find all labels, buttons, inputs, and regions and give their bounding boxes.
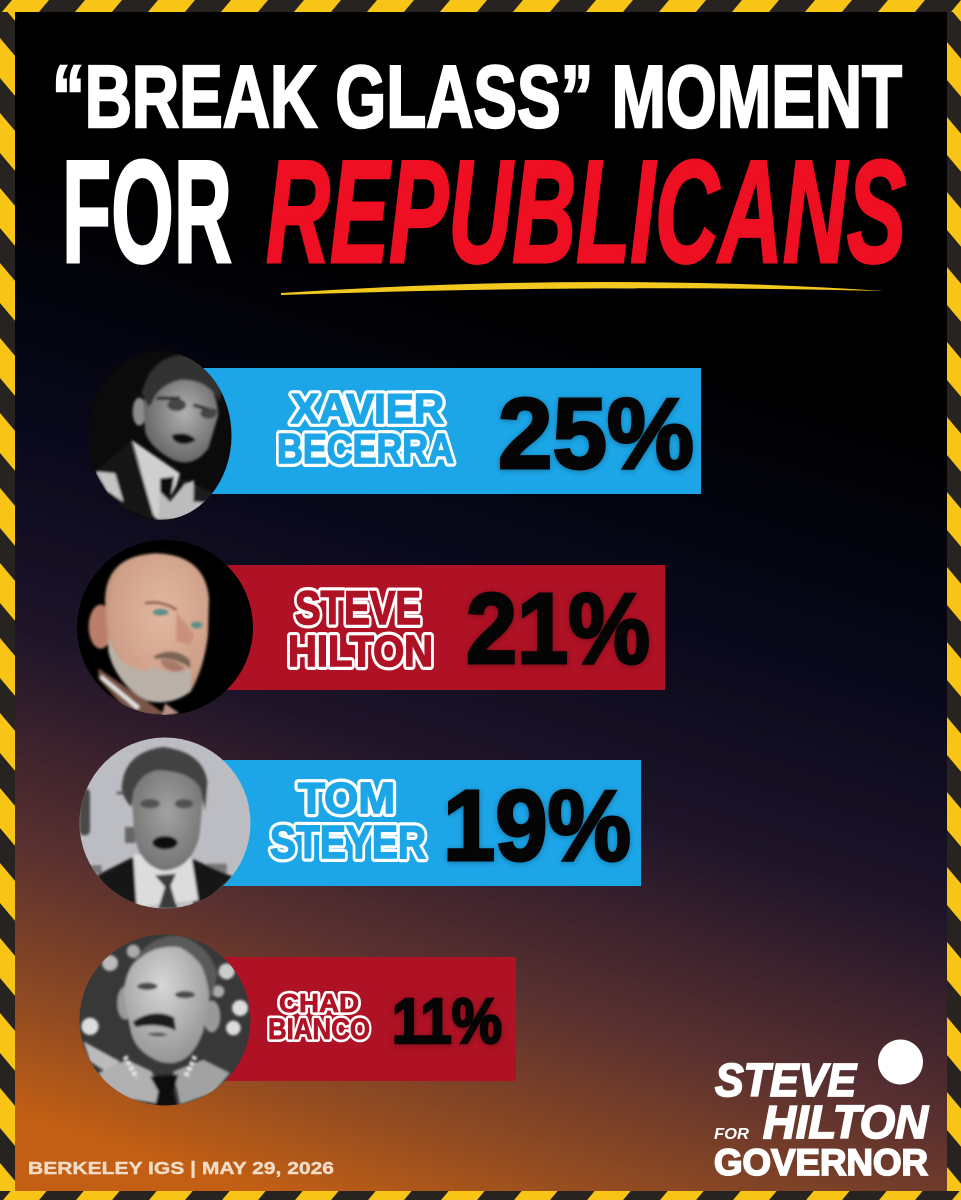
name: Xavier Becerra: XAVIER [291,385,444,432]
portrait: Becerra [85,348,235,523]
bar: Bianco [200,957,516,1081]
value: 19%: 19% [443,770,631,882]
name: Chad Bianco: CHAD [279,988,359,1018]
portrait: Bianco [78,933,253,1108]
value: 25%: 25% [498,378,694,490]
name: Steve Hilton: STEVE [295,581,421,634]
name: Xavier Becerra: BECERRA [277,425,454,472]
name: Tom Steyer: TOM [298,774,395,823]
row: Steve Hilton 21% [75,538,665,718]
name: Chad Bianco: BIANCO [268,1013,370,1046]
bar: Steyer [200,760,641,886]
portrait: Steyer [78,736,253,911]
name: Tom Steyer [270,774,426,868]
yellow underline [281,282,884,295]
campaign logo: HILTON [763,1096,929,1148]
name: Tom Steyer: STEYER [270,816,426,868]
name: Tom Steyer: TOM [298,774,395,823]
row: Xavier Becerra 25% [85,348,701,523]
bar: Becerra [200,368,701,494]
value: 11%: 11% [392,985,502,1057]
name: Steve Hilton [288,581,433,676]
value: 21%: 21% [466,573,650,685]
name: Chad Bianco: BIANCO [268,1013,370,1046]
name: Xavier Becerra: BECERRA [277,425,454,472]
logo dot [878,1040,923,1084]
title word: for: FOR [62,130,232,293]
name: Tom Steyer: STEYER [270,816,426,868]
name: Steve Hilton: HILTON [288,627,433,676]
campaign logo: FOR [714,1126,749,1143]
campaign logo [714,1040,929,1183]
name: Steve Hilton: HILTON [288,627,433,676]
name: Xavier Becerra [277,385,454,472]
name: Steve Hilton: STEVE [295,581,421,634]
name: Xavier Becerra: XAVIER [291,385,444,432]
name: Chad Bianco [268,988,370,1046]
row: Chad Bianco 11% [78,933,516,1108]
title [52,47,906,293]
campaign logo: STEVE [715,1054,857,1106]
row: Tom Steyer 19% [78,736,641,911]
source line: BERKELEY IGS | MAY 29, 2026 [28,1158,334,1178]
name: Chad Bianco: CHAD [279,988,359,1018]
portrait: Hilton [75,538,255,718]
campaign logo: GOVERNOR [714,1142,928,1183]
bar: Hilton [200,565,665,690]
